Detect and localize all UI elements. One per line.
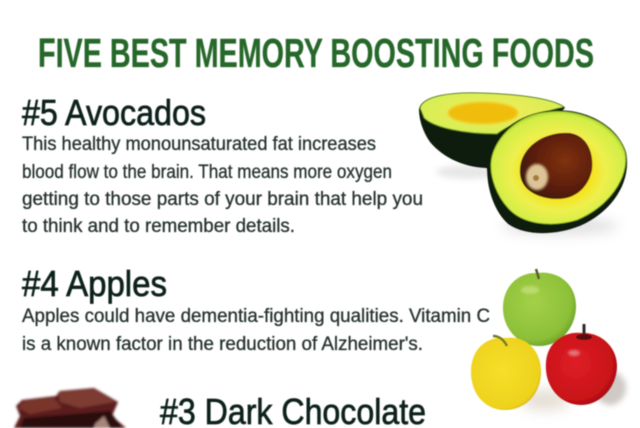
icon: avocado halves: [419, 93, 627, 235]
pit: [520, 133, 592, 199]
text block: avocados description: This healthy monounsaturated fat increases: [22, 134, 376, 155]
back half skin: [419, 93, 565, 168]
red apple: [546, 324, 617, 405]
back half flesh: [420, 93, 564, 134]
text block: avocados description: to think and to remember details.: [22, 216, 295, 237]
icon: dark chocolate: [14, 388, 126, 428]
section: avocados: [22, 92, 423, 237]
front half skin: [487, 110, 627, 233]
text block: apples description: Apples could have dementia-fighting qualities. Vitamin C: [22, 306, 490, 327]
heading: #5 Avocados: #5 Avocados: [22, 92, 206, 133]
text block: apples description: is a known factor in the reduction of Alzheimer's.: [22, 334, 423, 355]
text block: avocados description: blood flow to the brain. That means more oxygen: [22, 162, 392, 183]
text block: avocados description: getting to those parts of your brain that help you: [22, 189, 423, 210]
text block: apples description: [22, 306, 490, 355]
icon: three apples: [471, 269, 626, 411]
yellow apple: [471, 336, 541, 410]
text block: avocados description: [22, 134, 423, 237]
front half flesh: [491, 111, 626, 224]
section: apples: [22, 263, 490, 355]
green apple: [503, 269, 576, 346]
heading: #4 Apples: #4 Apples: [22, 263, 167, 304]
